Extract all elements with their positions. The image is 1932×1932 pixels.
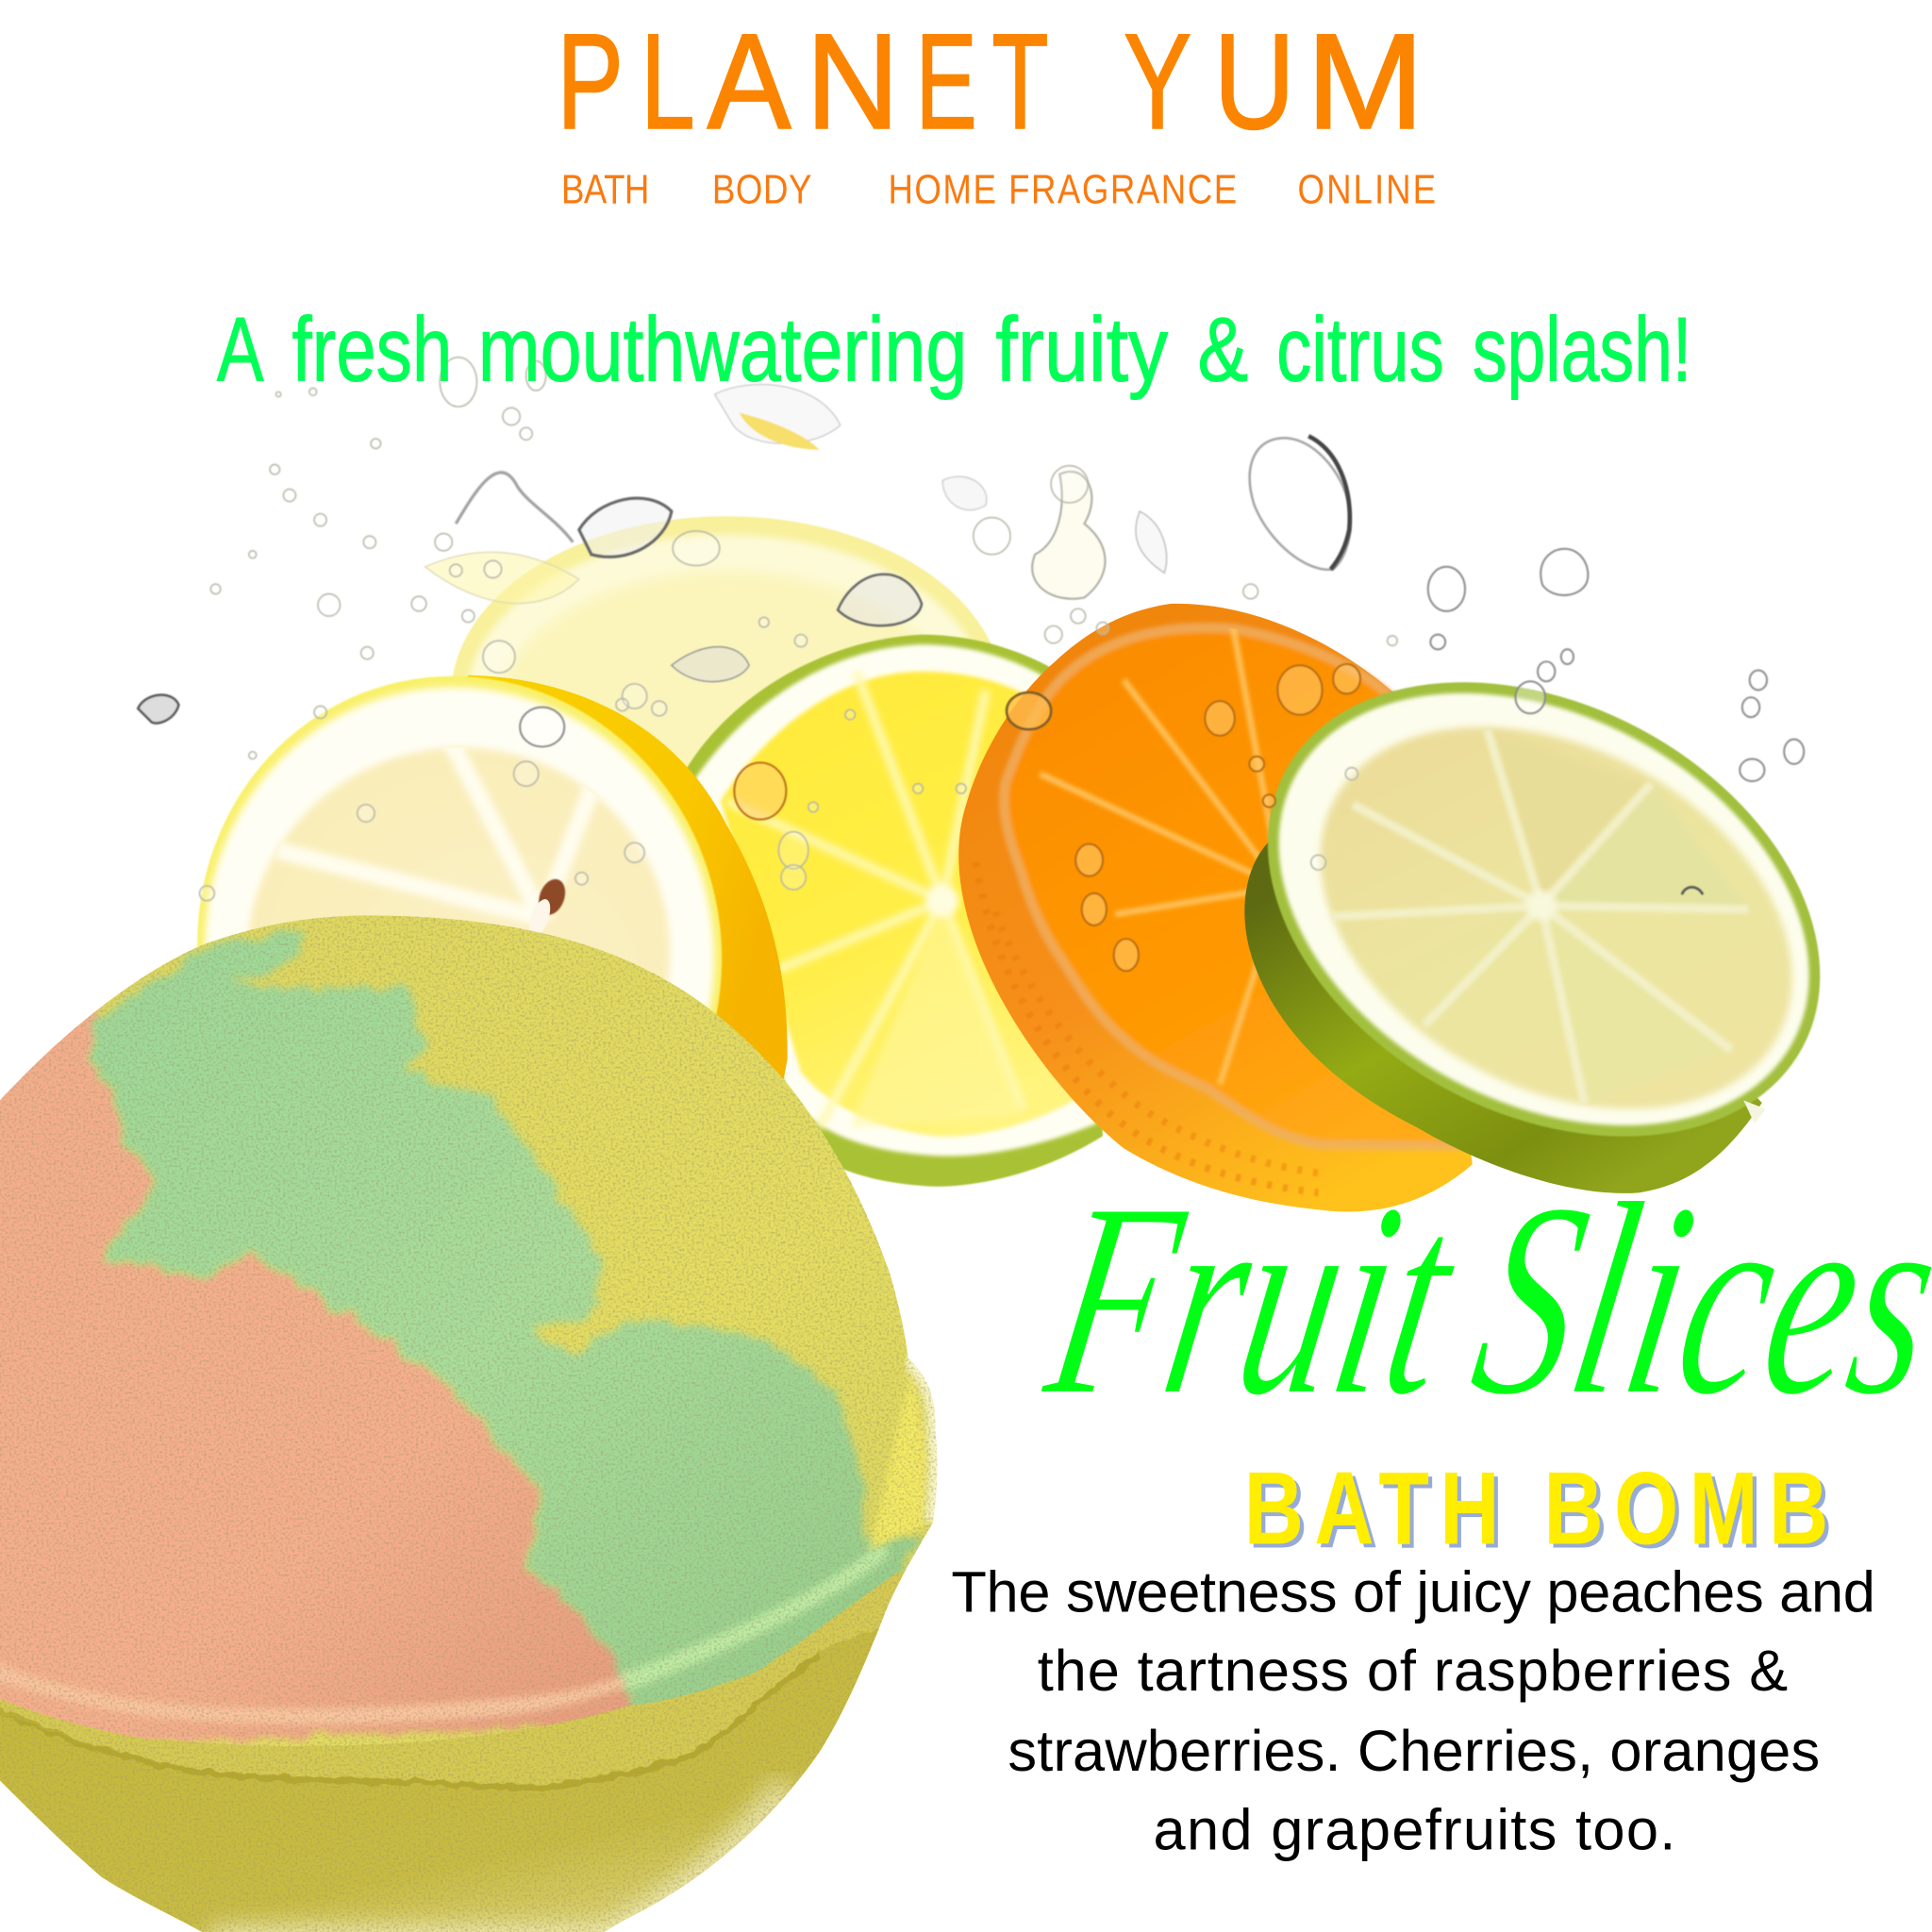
bomb green ridge highlight (623, 1542, 890, 1690)
title: PLANET YUM: U (1214, 7, 1295, 158)
description text: The sweetness of juicy peaches and (951, 1559, 1875, 1624)
title: PLANET YUM: E (915, 7, 977, 158)
product name: Fruit Slices (1027, 1146, 1932, 1453)
splash top yellow (715, 385, 841, 450)
bomb bottom fade (209, 1787, 789, 1932)
bomb peach ridge highlight (0, 1658, 631, 1724)
lime rind chip (1743, 1100, 1766, 1124)
bomb peach section (0, 998, 635, 1750)
navigation labels: ONLINE (1298, 168, 1436, 212)
title: PLANET YUM: A (708, 7, 791, 158)
illustration: front lemon slice (196, 675, 788, 1079)
bomb green section (92, 930, 918, 1719)
tagline: citrus (1276, 300, 1444, 401)
title: PLANET YUM (557, 7, 1424, 158)
illustration: lime slice (1244, 681, 1821, 1193)
title: PLANET YUM: Y (1124, 7, 1191, 158)
illustration: middle lemon slice (687, 635, 1103, 1187)
product name: Fruit Slices: Fruit (1027, 1146, 1479, 1453)
illustration: bath bomb (0, 912, 949, 1932)
description text (951, 1559, 1875, 1862)
tagline (217, 300, 1691, 401)
title: PLANET YUM: N (806, 7, 899, 158)
bomb pale edge (908, 1357, 937, 1523)
large splash droplet (1250, 436, 1351, 570)
description text: strawberries. Cherries, oranges (1008, 1719, 1820, 1784)
illustration: back lemon slice (451, 516, 1003, 876)
title: PLANET YUM: T (991, 7, 1049, 158)
bomb yellow highlight (869, 1374, 926, 1550)
tagline: A (217, 300, 264, 401)
navigation labels (561, 168, 1436, 212)
orange rind dimples (975, 862, 1319, 1192)
bomb crack shadow (0, 1656, 820, 1788)
water bubbles and splash (138, 358, 1804, 971)
bomb grain texture (0, 912, 949, 1932)
title: PLANET YUM: M (1306, 7, 1424, 158)
tagline: splash! (1473, 300, 1691, 401)
bomb lower hemisphere (0, 1629, 949, 1932)
navigation labels: BATH (561, 168, 649, 212)
description text: the tartness of raspberries & (1038, 1639, 1788, 1704)
bomb seam band (0, 1553, 949, 1932)
title: PLANET YUM: L (641, 7, 695, 158)
loose bubbles (138, 358, 1804, 971)
navigation labels: HOME FRAGRANCE (888, 168, 1237, 212)
title: PLANET YUM: P (557, 7, 624, 158)
lemon seed (525, 875, 570, 940)
tagline: fresh (292, 300, 452, 401)
bomb yellow top (0, 912, 949, 1774)
tagline: fruity (995, 300, 1169, 401)
splash cluster centre (942, 472, 1167, 599)
tagline: & (1198, 300, 1248, 401)
navigation labels: BODY (712, 168, 811, 212)
subtitle: BATH BOMB: BATH BOMB (1248, 1455, 1832, 1571)
illustration: orange slice (958, 604, 1473, 1211)
subtitle: BATH BOMB: BATH BOMB (1244, 1451, 1828, 1567)
splash cluster left (425, 473, 922, 682)
tagline: mouthwatering (478, 300, 967, 401)
description text: and grapefruits too. (1154, 1797, 1675, 1862)
